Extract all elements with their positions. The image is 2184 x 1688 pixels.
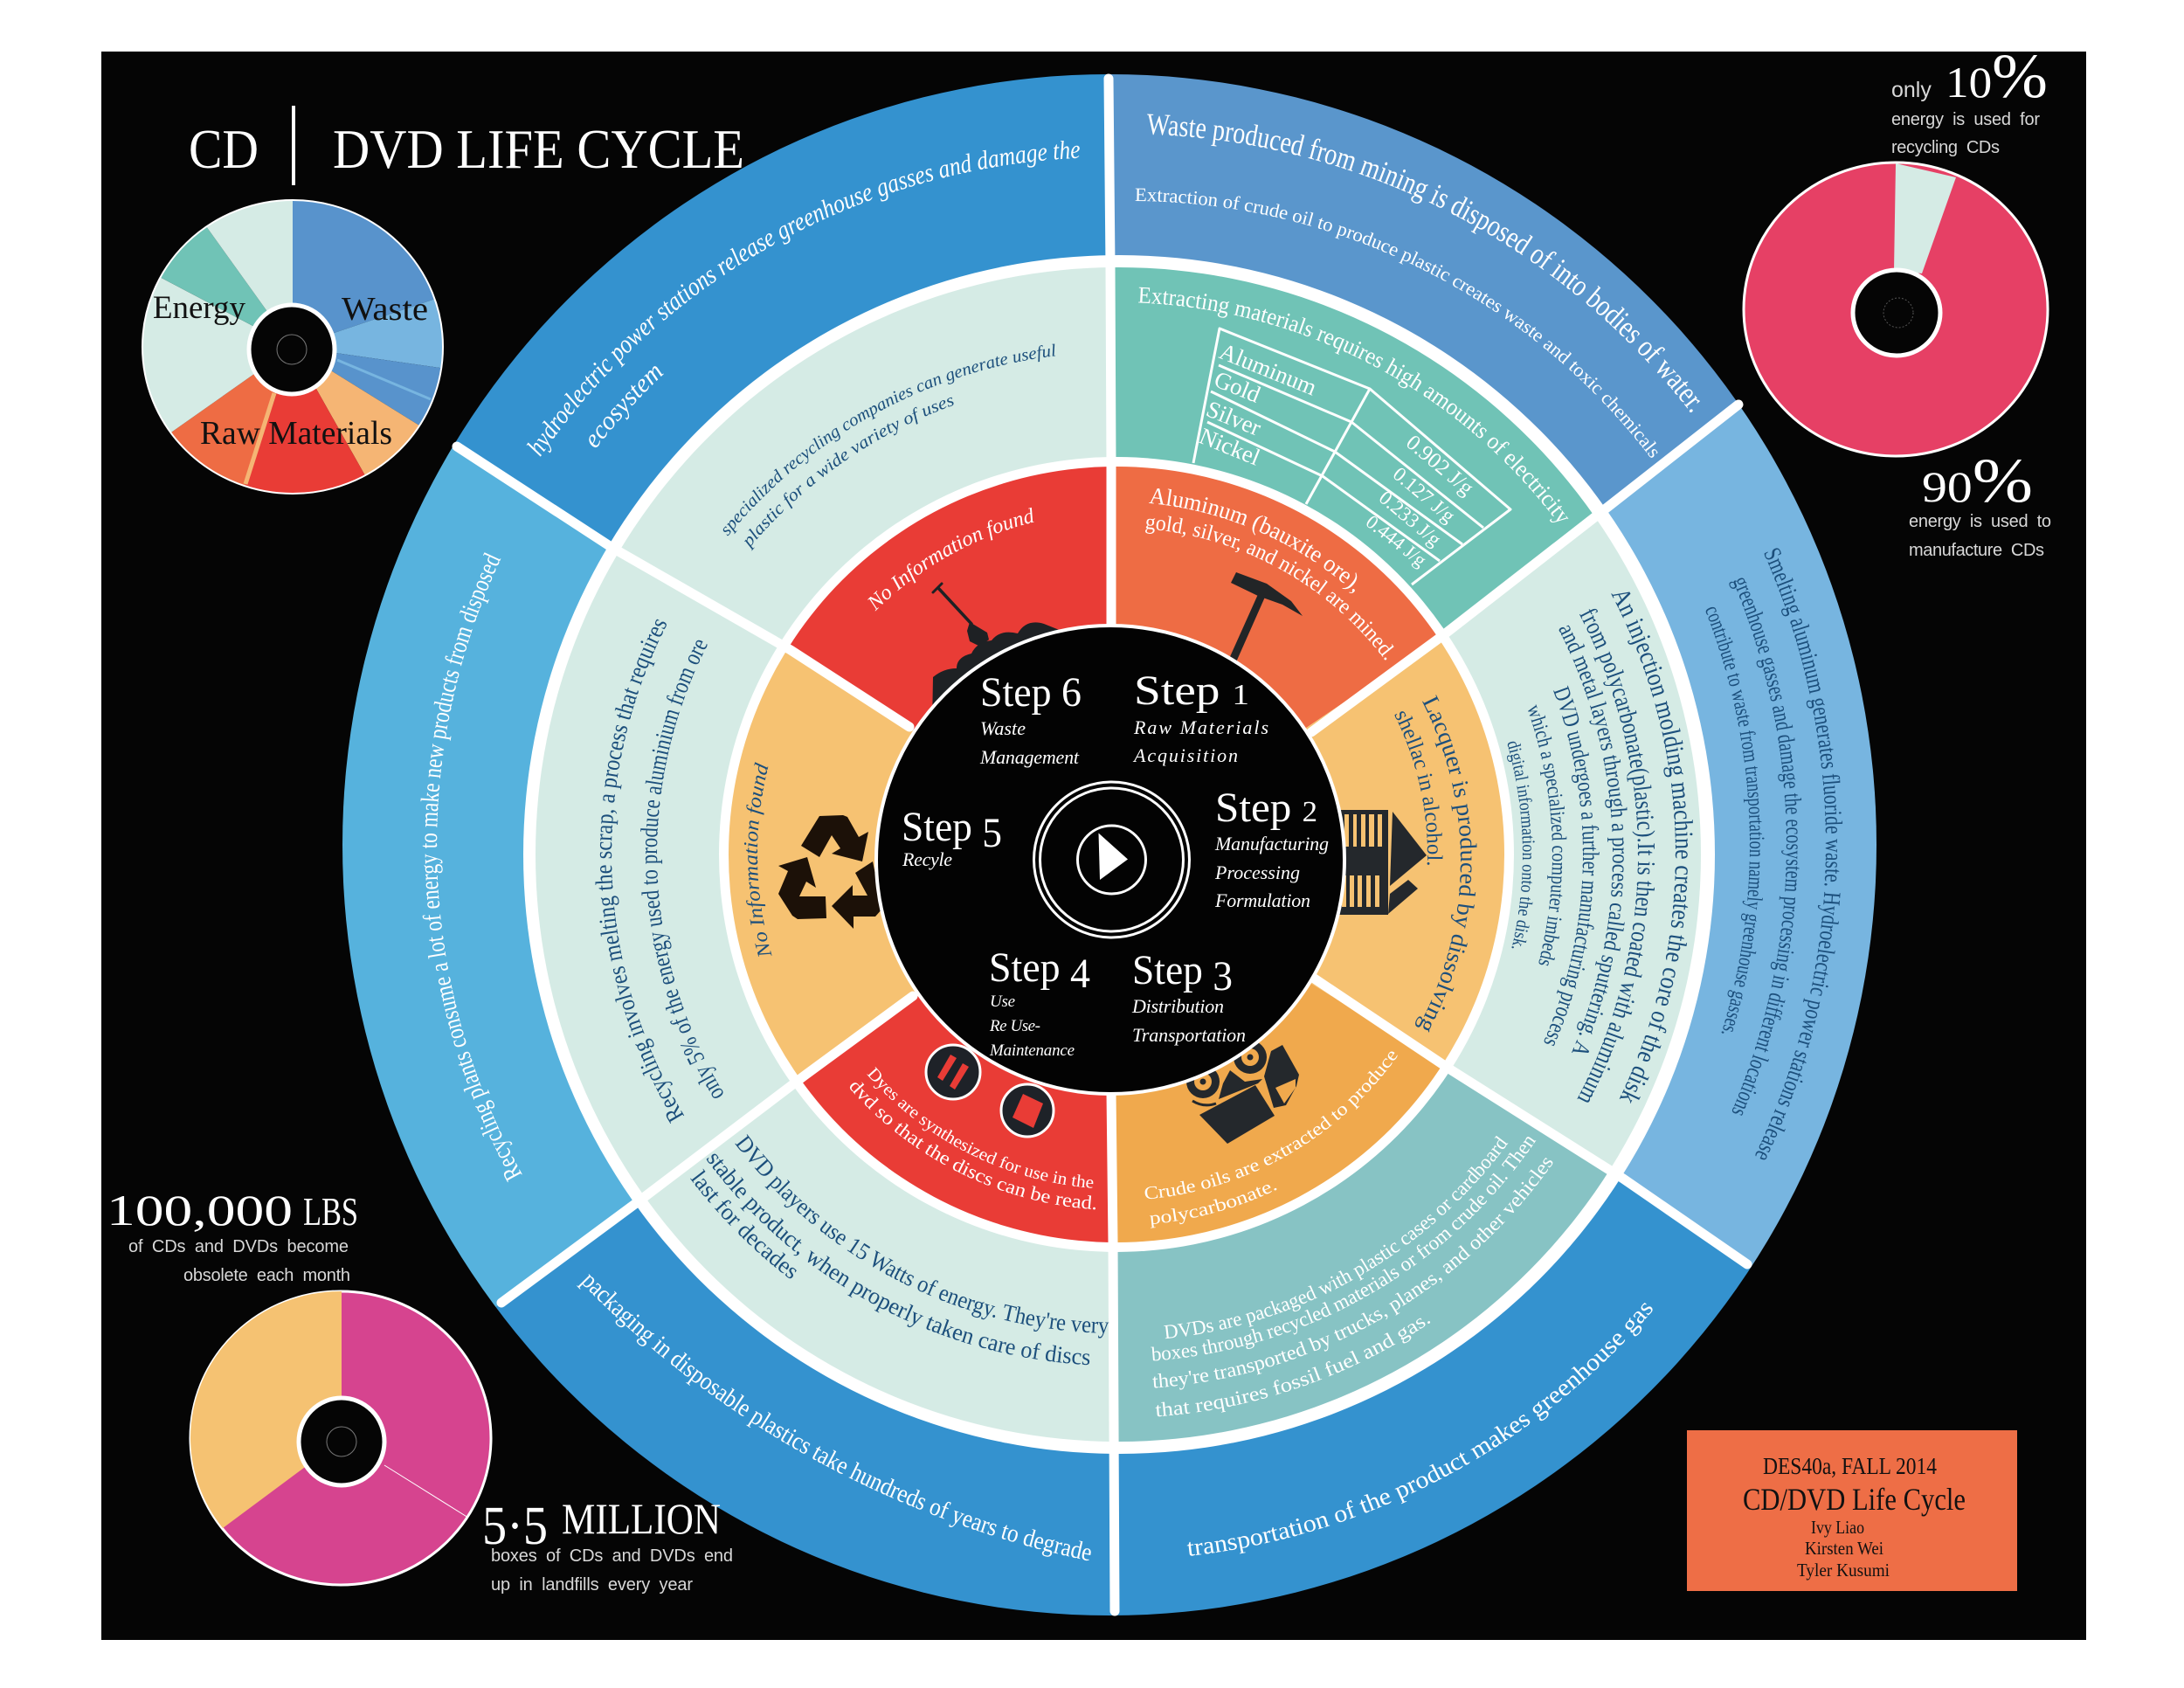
step 5: Step	[902, 804, 976, 850]
step 2: Manufacturing	[1214, 833, 1329, 854]
credits box: CD/DVD Life Cycle	[1743, 1482, 1966, 1517]
stat: 5.5 million: MILLION	[562, 1494, 721, 1543]
table: metal energy values	[1193, 329, 1510, 585]
icon: stop button	[1001, 1084, 1054, 1137]
text: packaged line 4: that requires fossil fuel and gas.	[1155, 1318, 1431, 1417]
segment: outer bottom left	[496, 1207, 1113, 1615]
step 4	[989, 944, 1090, 1060]
text: recycling line 1: Recycling involves melting the scrap, a process that requires	[434, 606, 894, 1127]
step 1: Acquisition	[1132, 744, 1238, 766]
segment: middle top right	[1115, 267, 1592, 629]
stat: 100,000 lbs: of CDs and DVDs become	[128, 1237, 349, 1256]
step 6: Waste	[980, 717, 1026, 739]
segment: outer left	[342, 447, 632, 1307]
text: no information top left: No Information found	[862, 467, 1046, 650]
step 3	[1131, 947, 1246, 1046]
stat: 100,000 lbs: 100,000	[107, 1186, 293, 1235]
table value silver: 0.233 J/g	[1375, 487, 1446, 550]
segment: outer top right	[1110, 74, 1737, 505]
table value gold: 0.127 J/g	[1389, 463, 1460, 527]
table label nickel: Nickel	[1196, 423, 1264, 471]
step 3: 3	[1213, 953, 1233, 1000]
title: DVD LIFE CYCLE	[333, 118, 744, 180]
table label silver: Silver	[1203, 396, 1265, 441]
step 1	[1132, 668, 1268, 766]
credits box: DES40a, FALL 2014	[1763, 1453, 1937, 1479]
step 5	[902, 804, 1002, 870]
inner ring text	[701, 467, 1581, 1285]
icon: shovel and dirt pile	[932, 584, 1075, 725]
table value aluminum: 0.902 J/g	[1401, 431, 1478, 501]
text: smelting line 1: Smelting aluminum generates fluoride waste. Hydroelectric power stations release	[1756, 548, 1843, 1160]
credits box: Kirsten Wei	[1805, 1538, 1883, 1559]
text: waste from mining: Waste produced from mining is disposed of into bodies of water.	[1147, 114, 1700, 412]
icon: pause button	[926, 1045, 980, 1099]
chart: 90 percent energy disc	[1744, 163, 2048, 456]
icon: truck	[1186, 1041, 1299, 1144]
step 4: Re Use-	[989, 1017, 1040, 1035]
text: injection line 3: and metal layers through a process called sputtering. A	[1559, 626, 1628, 1053]
white gap ring inner	[719, 457, 1514, 1252]
text: dvd read: dvd so that the discs can be read.	[845, 1008, 1109, 1285]
step 4: 4	[1070, 951, 1090, 997]
segment: inner bottom left	[803, 996, 1108, 1242]
step 1: Step 1	[1134, 668, 1249, 714]
label raw materials: Raw Materials	[200, 415, 392, 452]
text: ecosystem: ecosystem	[589, 366, 664, 447]
text: DVD players line 2: stable product, when properly taken care of discs	[706, 1153, 1090, 1365]
text: polycarbonate: polycarbonate.	[1146, 1173, 1282, 1228]
step 6	[979, 669, 1082, 768]
text: gold silver nickel: gold, silver, and nickel are mined.	[1136, 510, 1410, 666]
panel: inner ring processes	[729, 467, 1504, 1242]
stat: only 10 percent: only	[1891, 78, 1932, 102]
title	[189, 106, 744, 185]
text: hydroelectric stations: hydroelectric power stations release greenhouse gasses and damage the	[526, 141, 1080, 457]
text: smelting line 2: greenhouse gasses and damage the ecosystem processing in different locations	[1729, 578, 1801, 1116]
step 3: Transportation	[1132, 1024, 1246, 1046]
step 6: Management	[979, 746, 1080, 768]
step 3: Step	[1132, 947, 1206, 993]
stat: 100,000 lbs: obsolete each month	[183, 1266, 350, 1285]
step 6: Step 6	[980, 669, 1082, 716]
step 2: Step 2	[1215, 785, 1317, 831]
credits box: Ivy Liao	[1811, 1517, 1864, 1538]
segment: inner top left	[790, 467, 1106, 730]
step 1: Raw Materials	[1133, 716, 1268, 738]
text: crude oils: Crude oils are extracted to produce	[1133, 1044, 1413, 1204]
stat: 5.5 million: boxes of CDs and DVDs end	[491, 1546, 733, 1566]
icon: play button	[1034, 782, 1190, 937]
credits box: Tyler Kusumi	[1797, 1560, 1890, 1581]
text: injection line 1: An injection molding machine creates the core of the disk	[1611, 592, 1693, 1103]
text: recycling plants: Recycling plants consume a lot of energy to make new products from disposed	[420, 552, 522, 1183]
step 2: Formulation	[1214, 889, 1310, 911]
text: injection line 2: from polycarbonate(plastic).It is then coated with aluminum	[1578, 608, 1655, 1103]
stat: only 10 percent	[1891, 41, 2048, 157]
label energy: Energy	[153, 290, 245, 326]
step 4: Maintenance	[989, 1041, 1075, 1060]
text: recycling companies line 2: plastic for a wide variety of uses	[744, 397, 954, 550]
middle ring text	[434, 249, 1850, 1482]
segment: outer bottom right	[1116, 1181, 1751, 1615]
text: packaging: packaging in disposable plastics take hundreds of years to degrade	[577, 1274, 1091, 1560]
label waste: Waste	[342, 291, 428, 328]
step 2: Processing	[1214, 861, 1300, 883]
text: recycling companies line 1: specialized recycling companies can generate useful	[723, 344, 1055, 536]
text: crude oil extraction: Extraction of crude oil to produce plastic creates waste and toxic chemicals	[1136, 189, 1658, 458]
panel: outer ring impacts	[342, 74, 1876, 1615]
segment: middle left	[536, 556, 790, 1193]
text: shellac: shellac in alcohol.	[1355, 706, 1482, 876]
text: aluminum bauxite: Aluminum (bauxite ore),	[1142, 482, 1376, 598]
table label aluminum: Aluminum	[1216, 338, 1320, 400]
segment: middle bottom left	[648, 1089, 1109, 1442]
panel: middle ring energy and materials	[536, 267, 1701, 1442]
text: injection line 4: DVD undergoes a further manufacturing process	[1545, 685, 1600, 1047]
step 4: Step	[989, 944, 1063, 991]
text: dyes: Dyes are synthesized for use in the	[863, 1004, 1103, 1256]
text: DVD players line 1: DVD players use 15 Watts of energy. They're very	[735, 1134, 1109, 1339]
stat: only 10 percent: 10%	[1946, 41, 2048, 111]
segment: inner bottom right	[1116, 984, 1440, 1242]
segment: middle right	[1448, 521, 1701, 1166]
white gap ring	[523, 255, 1715, 1454]
text: injection line 5: which a specialized computer imbeds	[1528, 704, 1567, 966]
stat: only 10 percent: recycling CDs	[1891, 138, 2000, 157]
text: packaged line 1: DVDs are packaged with plastic cases or cardboard	[1164, 1136, 1508, 1339]
central black disc	[876, 626, 1344, 1094]
step 5: 5	[982, 810, 1002, 856]
text: packaged line 2: boxes through recycled materials or from crude oil. Then	[1151, 1137, 1536, 1361]
credits box	[1687, 1430, 2017, 1591]
text: lacquer: Lacquer is produced by dissolving	[1282, 691, 1581, 1044]
icon: pickaxe	[1228, 572, 1303, 664]
title: CD	[189, 118, 259, 180]
icon: recycle arrows	[778, 815, 882, 929]
text: DVD players line 3: last for decades	[686, 1154, 808, 1296]
text: recycling line 2: only 5% of the energy used to produce aluminium from ore	[492, 626, 916, 1105]
segment: inner left	[729, 653, 916, 1075]
chart: waste energy raw materials disc	[142, 199, 444, 495]
stat: 90 percent: energy is used to	[1909, 512, 2051, 531]
step 3: Distribution	[1131, 995, 1224, 1017]
text: injection line 6: digital information onto the disk.	[1507, 741, 1535, 949]
stat: 100,000 lbs: LBS	[303, 1189, 358, 1234]
stat: 5.5 million	[482, 1494, 733, 1595]
table value nickel: 0.444 J/g	[1362, 510, 1431, 571]
chart: obsolete discs	[190, 1291, 491, 1585]
step 2	[1214, 785, 1329, 911]
segment: outer right	[1608, 408, 1876, 1267]
segment: middle bottom right	[1118, 1074, 1607, 1442]
text: extracting materials: Extracting materials requires high amounts of electricity	[1138, 287, 1569, 522]
segment: middle top left	[622, 267, 1106, 640]
segment: inner top right	[1116, 467, 1436, 729]
segment: outer top left	[456, 74, 1106, 542]
segment: inner right	[1306, 643, 1504, 1061]
stat: 5.5 million: 5·5	[482, 1497, 548, 1556]
step 5: Recyle	[902, 848, 952, 870]
stat: 5.5 million: up in landfills every year	[491, 1575, 693, 1595]
icon: factory	[1328, 810, 1427, 915]
text: transportation: transportation of the product makes greenhouse gas	[1186, 1303, 1653, 1556]
text: no information left: No Information found	[701, 756, 824, 961]
text: packaged line 3: they're transported by trucks, planes, and other vehicles	[1152, 1158, 1553, 1390]
stat: 90 percent	[1909, 446, 2051, 560]
stat: 90 percent: manufacture CDs	[1909, 541, 2044, 560]
table label gold: Gold	[1211, 366, 1265, 408]
step 4: Use	[990, 993, 1015, 1011]
stat: 90 percent: 90%	[1922, 446, 2033, 515]
text: smelting line 3: contribute to waste from transportation namely greenhouse gasses.	[1705, 606, 1765, 1034]
stat: only 10 percent: energy is used for	[1891, 110, 2040, 129]
stat: 100,000 lbs	[107, 1186, 358, 1285]
